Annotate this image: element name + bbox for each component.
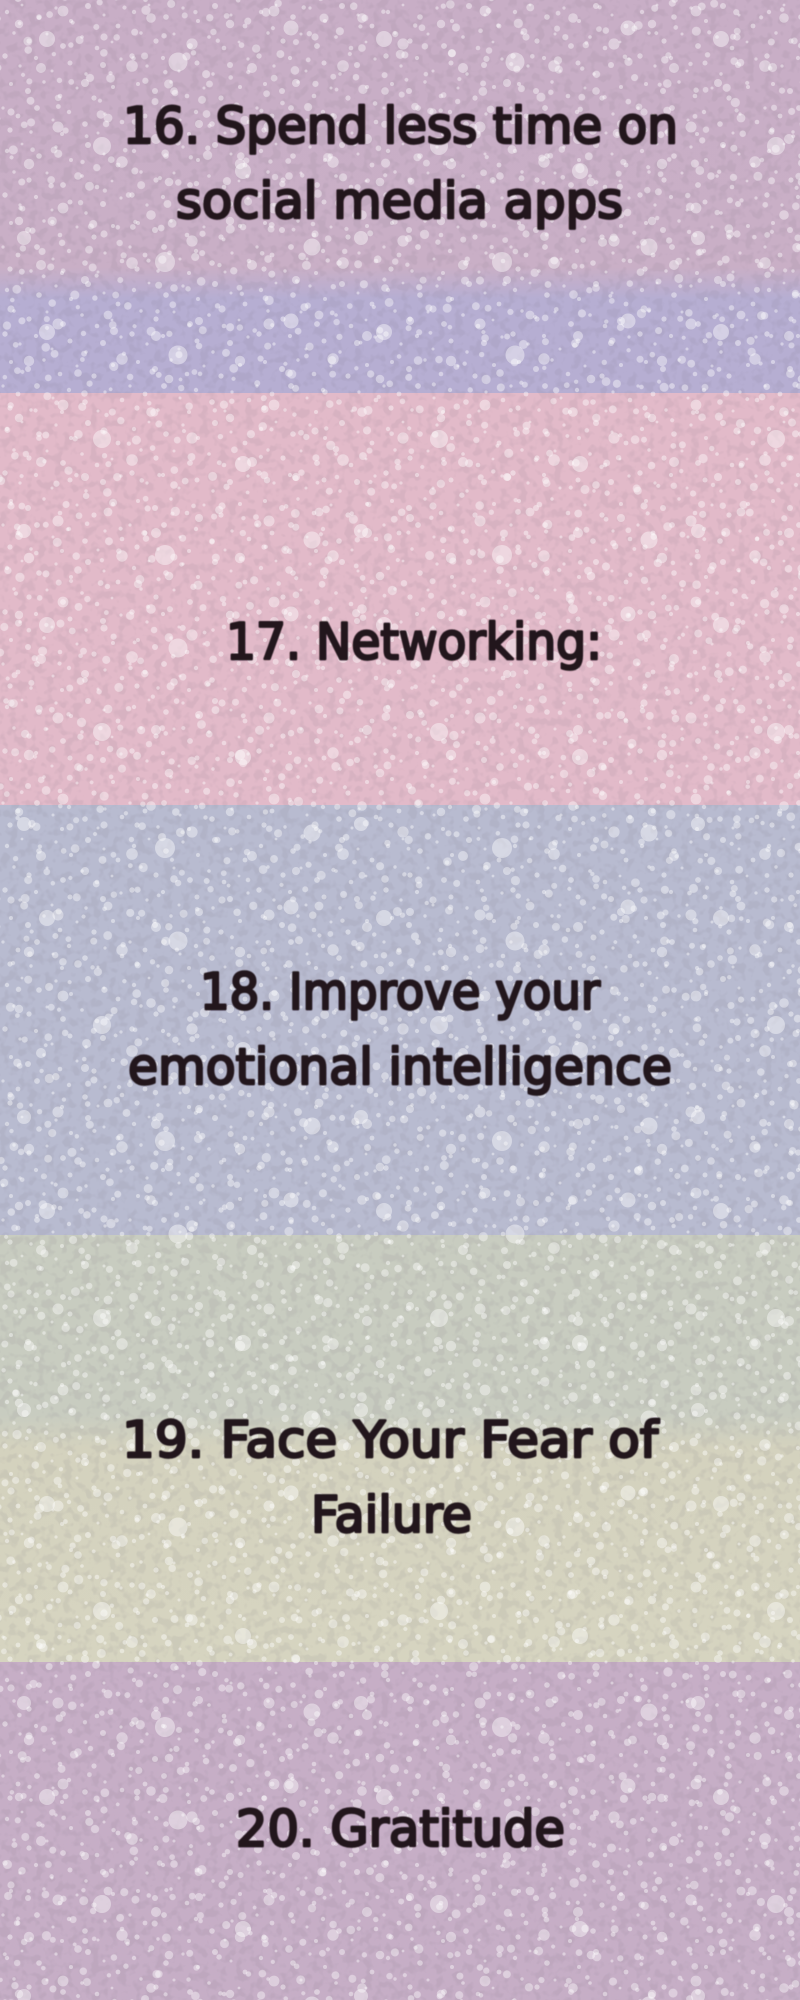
heading: 16. Spend less time on social media apps: 16. Spend less time on <box>123 97 678 155</box>
heading: 18. Improve your emotional intelligence: emotional intelligence <box>128 1038 672 1096</box>
panel: 16 social media <box>0 0 800 393</box>
heading: 16. Spend less time on social media apps: social media apps <box>176 172 623 230</box>
panel: 18 emotional intelligence <box>0 805 800 1235</box>
heading: 20. Gratitude: 20. Gratitude <box>236 1800 565 1858</box>
heading: 16. Spend less time on social media apps <box>123 97 678 230</box>
panel: 20 gratitude <box>0 1662 800 2000</box>
heading: 18. Improve your emotional intelligence <box>128 963 672 1096</box>
panel: 19 fear of failure <box>0 1235 800 1662</box>
heading: 19. Face Your Fear of Failure: 19. Face Your Fear of <box>122 1411 659 1469</box>
panel: 17 networking <box>0 393 800 805</box>
heading: 19. Face Your Fear of Failure: Failure <box>311 1486 472 1544</box>
heading: 18. Improve your emotional intelligence: 18. Improve your <box>200 963 600 1021</box>
heading: 19. Face Your Fear of Failure <box>122 1411 659 1544</box>
heading: 17. Networking: 17. Networking: <box>226 613 602 671</box>
